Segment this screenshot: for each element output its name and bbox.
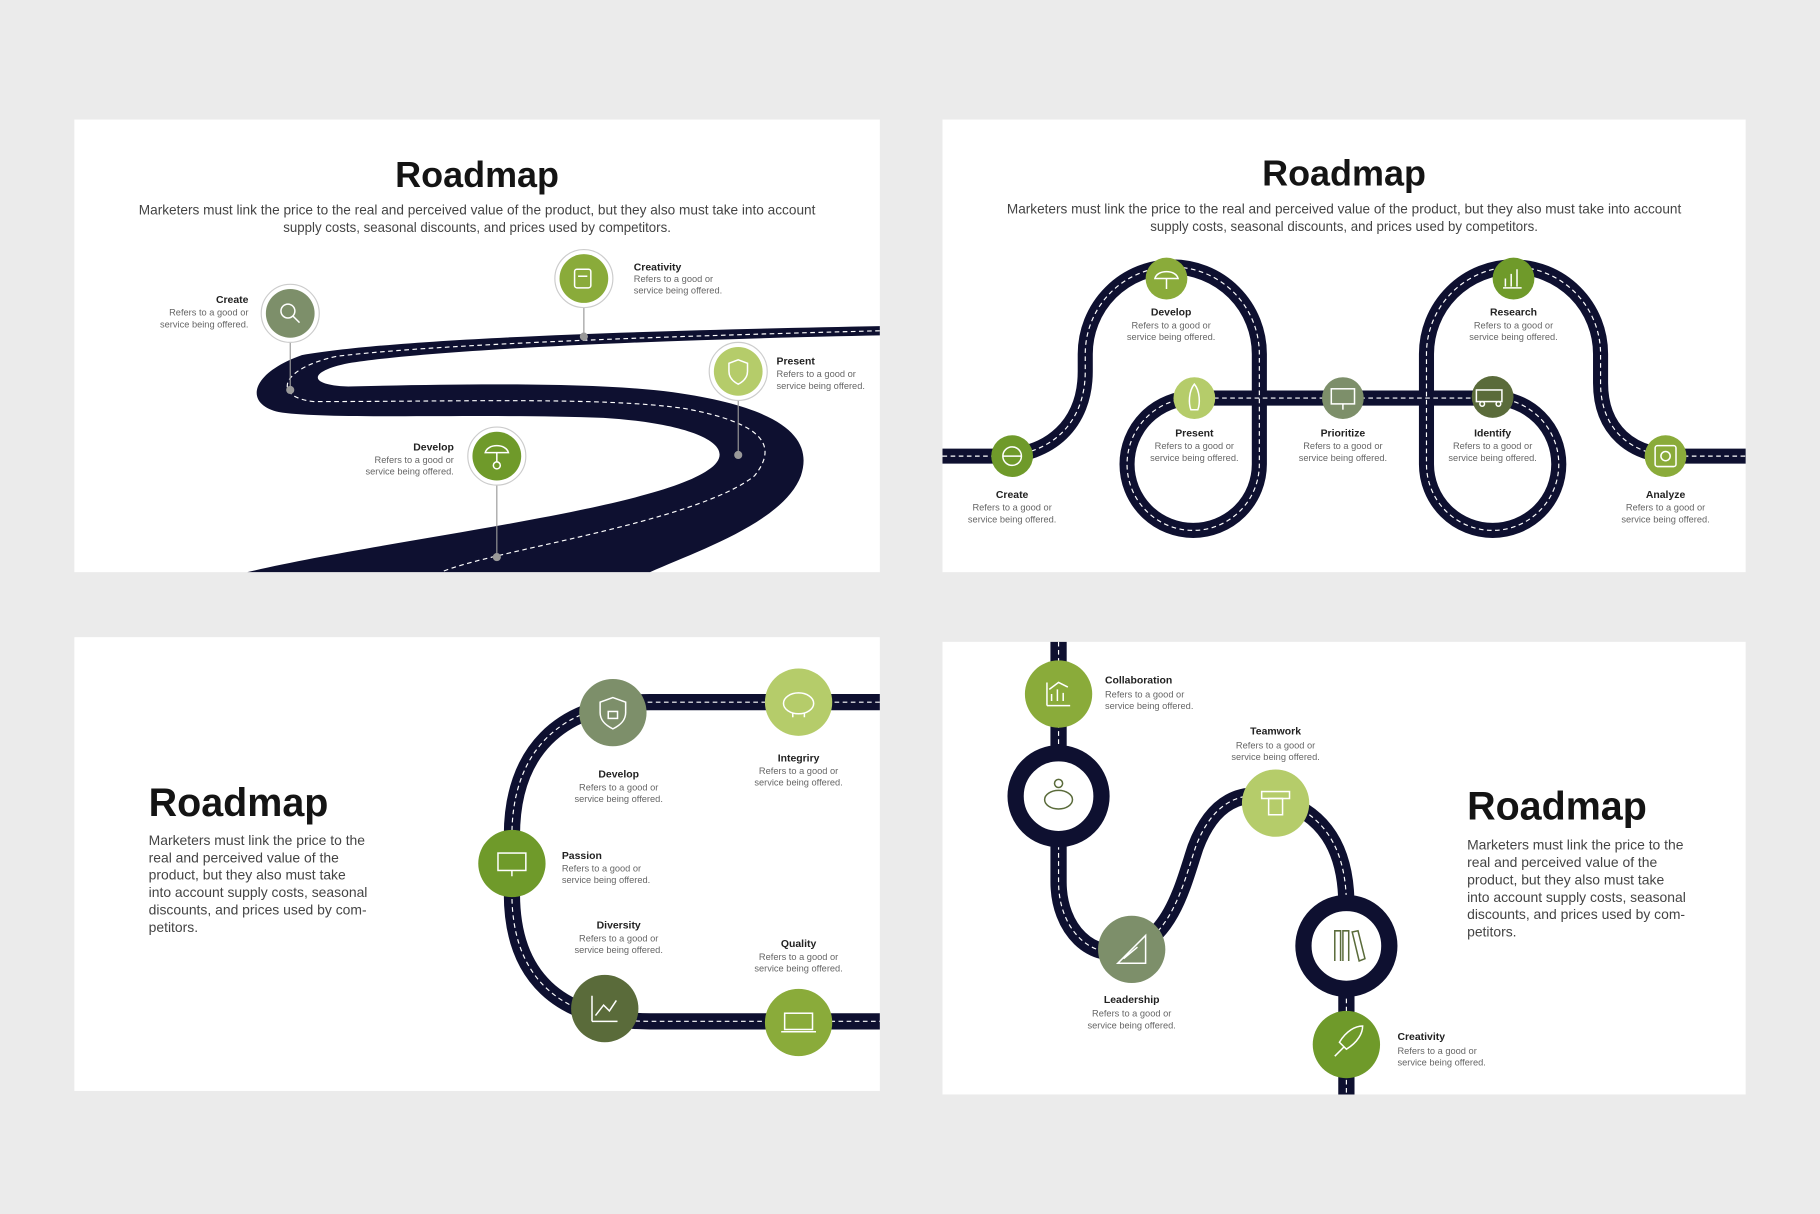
node: Passion (478, 830, 650, 897)
node: Creativity: service being offered. (1397, 1057, 1486, 1067)
paragraph (1467, 837, 1686, 940)
node: Identify: Refers to a good or (1453, 441, 1532, 451)
paragraph: discounts, and prices used by com- (1467, 906, 1685, 922)
paragraph: real and perceived value of the (1467, 854, 1658, 870)
node: Present (1150, 377, 1239, 463)
node: Present: service being offered. (1150, 453, 1239, 463)
subtitle: supply costs, seasonal discounts, and prices used by competitors. (283, 220, 671, 235)
node: Passion: Passion (562, 851, 602, 862)
node: Teamwork: Teamwork (1250, 727, 1301, 738)
node: Passion: service being offered. (562, 875, 650, 885)
node: Creativity: Refers to a good or (634, 274, 713, 284)
node: Creativity (555, 250, 722, 341)
node: Develop: service being offered. (574, 794, 663, 804)
subtitle: Marketers must link the price to the real and perceived value of the product, but they also must take into account (139, 203, 816, 218)
node: Collaboration: service being offered. (1105, 701, 1193, 711)
paragraph: petitors. (149, 919, 198, 935)
node: Analyze: service being offered. (1621, 514, 1710, 524)
paragraph: petitors. (1467, 924, 1517, 940)
title: Roadmap (395, 154, 559, 195)
node: Collaboration: Collaboration (1105, 676, 1172, 687)
subtitle (1007, 202, 1681, 234)
node: Quality: service being offered. (754, 963, 843, 973)
node: Leadership: Leadership (1104, 995, 1160, 1006)
node: Quality: Refers to a good or (759, 952, 838, 962)
paragraph: real and perceived value of the (149, 849, 339, 865)
node: Develop: Develop (413, 442, 454, 453)
node: Integrity: Refers to a good or (759, 766, 838, 776)
node: Present (709, 342, 865, 459)
node: Create: service being offered. (160, 319, 248, 329)
node: Develop (1127, 258, 1215, 342)
node: Research: Refers to a good or (1474, 320, 1553, 330)
paragraph: Marketers must link the price to the (149, 832, 365, 848)
node: Prioritize (1299, 377, 1387, 463)
panel: bottom-left roadmap (74, 637, 880, 1091)
node: Integrity: Integriry (778, 753, 820, 764)
node: Integrity: service being offered. (754, 778, 843, 788)
ring: books (1303, 903, 1389, 989)
node: Teamwork: service being offered. (1231, 752, 1320, 762)
node: Present: Present (777, 356, 815, 367)
node: Develop: service being offered. (365, 467, 454, 477)
node: Research: service being offered. (1469, 332, 1558, 342)
node: Quality (754, 939, 843, 1056)
node: Analyze (1621, 435, 1710, 524)
paragraph: Marketers must link the price to the (1467, 837, 1684, 853)
node: Develop: Refers to a good or (579, 782, 658, 792)
node: Create: Create (216, 295, 249, 306)
node: Develop: service being offered. (1127, 332, 1215, 342)
node: Research (1469, 258, 1558, 342)
node: Develop (365, 427, 526, 561)
node: Diversity: service being offered. (574, 945, 663, 955)
node: Prioritize: Prioritize (1321, 428, 1365, 439)
node: Creativity (1313, 1011, 1486, 1078)
node: Create: Create (996, 490, 1029, 501)
node: Present: Refers to a good or (777, 369, 856, 379)
node: Create: Refers to a good or (972, 503, 1052, 513)
node: Create (160, 284, 319, 394)
node: Leadership: service being offered. (1087, 1020, 1176, 1030)
paragraph: into account supply costs, seasonal (149, 884, 367, 900)
title: Roadmap (149, 781, 328, 825)
node: Develop: Refers to a good or (375, 455, 454, 465)
node: Leadership: Refers to a good or (1092, 1009, 1171, 1019)
node: Analyze: Analyze (1646, 490, 1685, 501)
panel: top-left roadmap (74, 120, 880, 572)
node: Diversity (571, 920, 663, 1042)
road: winding (247, 326, 880, 572)
node: Leadership (1087, 916, 1176, 1030)
node: Present: Refers to a good or (1155, 441, 1234, 451)
subtitle: Marketers must link the price to the real and perceived value of the product, but they also must take into account (1007, 202, 1681, 217)
node: Diversity: Refers to a good or (579, 933, 658, 943)
node: Diversity: Diversity (597, 920, 641, 931)
node: Develop: Refers to a good or (1131, 320, 1211, 330)
panel: bottom-right roadmap (942, 642, 1746, 1094)
node: Integrity (754, 669, 843, 788)
node: Creativity: Creativity (634, 262, 682, 273)
node: Collaboration (1025, 660, 1193, 728)
node: Identify: service being offered. (1448, 453, 1537, 463)
node: Creativity: Refers to a good or (1397, 1046, 1477, 1056)
road: loops (942, 267, 1746, 530)
node: Quality: Quality (781, 939, 816, 950)
panel: top-right roadmap (942, 120, 1746, 572)
paragraph: discounts, and prices used by com- (149, 902, 367, 918)
node: Present: service being offered. (777, 381, 865, 391)
title: Roadmap (1262, 153, 1426, 194)
node: Creativity: service being offered. (634, 286, 722, 296)
node: Teamwork: Refers to a good or (1236, 741, 1315, 751)
paragraph: product, but they also must take (1467, 871, 1664, 887)
node: Present: Present (1175, 428, 1214, 439)
ring: piggy bank (1016, 753, 1102, 839)
node: Collaboration: Refers to a good or (1105, 690, 1184, 700)
node: Develop: Develop (598, 770, 639, 781)
node: Prioritize: Refers to a good or (1303, 441, 1383, 451)
title: Roadmap (1467, 784, 1647, 828)
node: Create: service being offered. (968, 514, 1056, 524)
node: Creativity: Creativity (1397, 1032, 1445, 1043)
node: Develop (574, 679, 663, 804)
node: Research: Research (1490, 308, 1537, 319)
node: Create (968, 435, 1056, 524)
paragraph (149, 832, 367, 935)
node: Create: Refers to a good or (169, 308, 248, 318)
node: Develop: Develop (1151, 308, 1191, 319)
road: C-curve (512, 702, 880, 1021)
subtitle (139, 203, 816, 235)
road: vertical wave (1059, 642, 1346, 1094)
node: Identify: Identify (1474, 428, 1511, 439)
node: Teamwork (1231, 727, 1320, 837)
node: Prioritize: service being offered. (1299, 453, 1387, 463)
node: Identify (1448, 376, 1537, 463)
node: Analyze: Refers to a good or (1626, 503, 1705, 513)
node: Passion: Refers to a good or (562, 864, 641, 874)
paragraph: into account supply costs, seasonal (1467, 889, 1686, 905)
paragraph: product, but they also must take (149, 867, 346, 883)
subtitle: supply costs, seasonal discounts, and prices used by competitors. (1150, 219, 1538, 234)
